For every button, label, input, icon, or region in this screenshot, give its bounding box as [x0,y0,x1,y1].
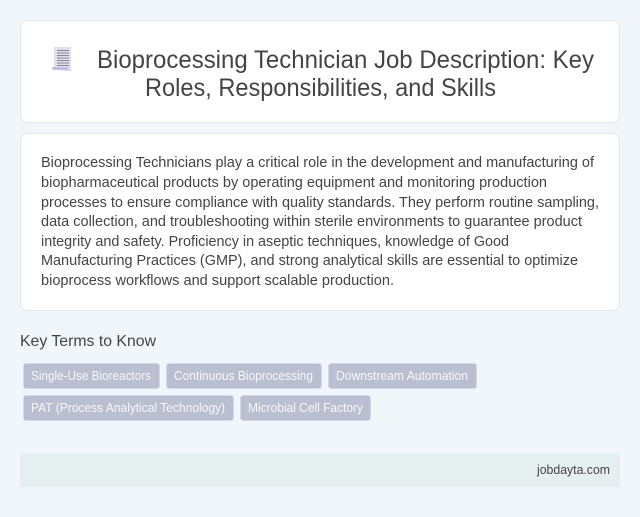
description text: processes to ensure compliance with quality standards. They perform routine sampling, [41,195,599,211]
footer text: jobdayta.com [536,463,610,477]
description text [41,155,599,289]
tag: Single-Use Bioreactors [23,363,160,389]
title: Roles, Responsibilities, and Skills [145,74,496,102]
description text: Manufacturing Practices (GMP), and strong analytical skills are essential to optimize [41,253,578,269]
description text: biopharmaceutical products by operating equipment and monitoring production [41,175,547,191]
tag: Continuous Bioprocessing [166,363,322,389]
description text: integrity and safety. Proficiency in aseptic techniques, knowledge of Good [41,234,509,250]
tag labels: PAT (Process Analytical Technology) [31,401,225,415]
icon: document [52,47,72,71]
footer bar [20,453,620,487]
description text: Bioprocessing Technicians play a critical role in the development and manufacturing of [41,155,595,171]
tag labels: Single-Use Bioreactors [31,369,151,383]
title: Bioprocessing Technician Job Description: Key [97,46,594,74]
tag: PAT (Process Analytical Technology) [23,395,234,421]
description text: data collection, and troubleshooting within sterile environments to guarantee product [41,214,582,230]
tag labels: Microbial Cell Factory [248,401,364,415]
tag labels: Continuous Bioprocessing [174,369,313,383]
heading: Key Terms to Know: Key Terms to Know [20,333,156,350]
panel: title card [20,20,620,123]
title [97,46,594,102]
tag: Microbial Cell Factory [240,395,371,421]
tag labels [31,369,468,415]
description text: bioprocess workflows and support scalable production. [41,273,394,289]
panel: description card [20,133,620,311]
tag: Downstream Automation [328,363,477,389]
tag labels: Downstream Automation [336,369,468,383]
